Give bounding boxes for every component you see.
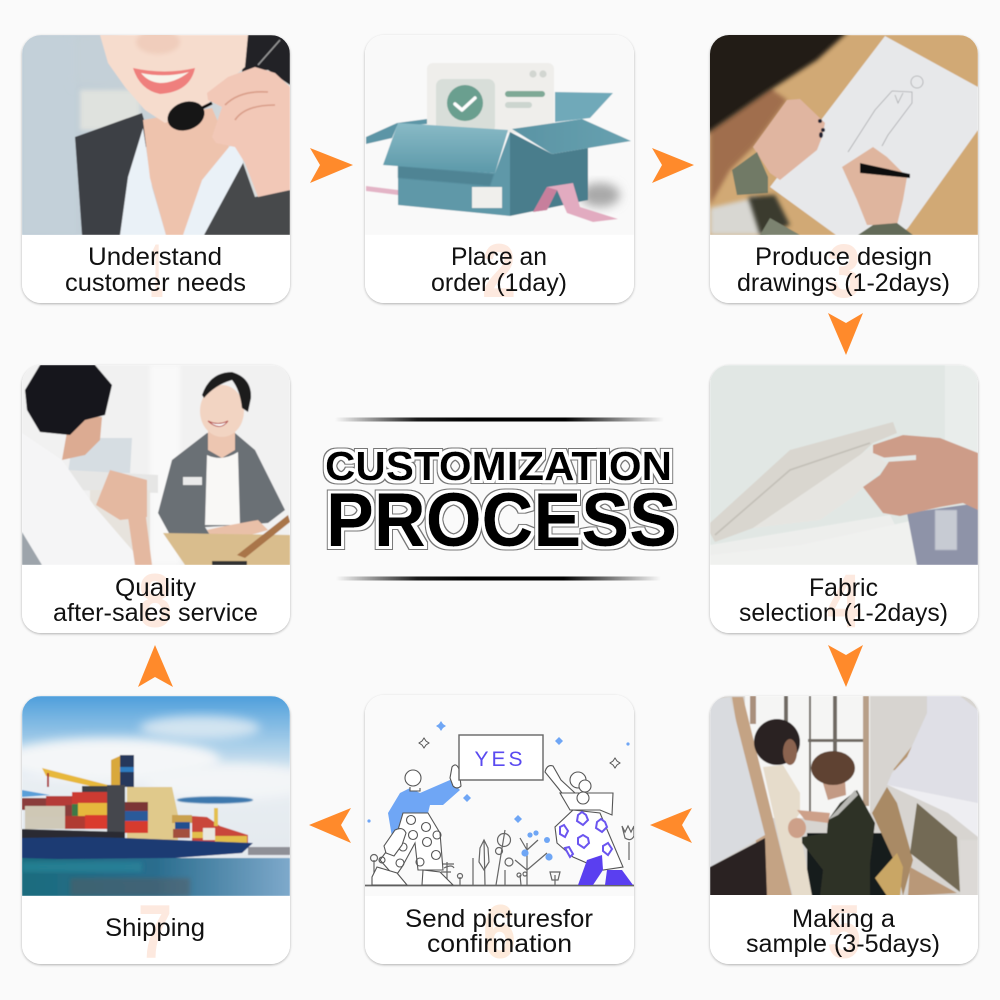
- caption: Shipping: [105, 914, 205, 942]
- panel: step 3 produce design drawings: [705, 30, 978, 314]
- arrow: step 6 to 7: [309, 808, 351, 843]
- title block: [325, 418, 677, 580]
- sign: [459, 735, 543, 780]
- step number 8: 8: [138, 559, 172, 644]
- right figure: [545, 766, 633, 885]
- panel: step 3 produce design drawings: drawings (1-2days): [737, 269, 950, 297]
- caption: Understand: [88, 243, 222, 271]
- photo: tailors fitting a garment: [710, 696, 978, 896]
- step number 3: 3: [827, 229, 861, 314]
- title line 2: PROCESS: [326, 478, 677, 563]
- panel: step 2 place an order: [365, 35, 634, 314]
- photo: hands sketching a design: [705, 30, 978, 235]
- illustration: open box with order document: [365, 62, 632, 223]
- arrow: step 1 to 2: [310, 148, 353, 183]
- caption: Fabric: [809, 574, 878, 602]
- title line 1: CUSTOMIZATION: [325, 443, 672, 489]
- step number 7: 7: [138, 890, 172, 975]
- panel: step 1 understand customer needs: [22, 30, 290, 314]
- panel: step 2 place an order: order (1day): [431, 269, 567, 297]
- plants: [365, 826, 634, 886]
- panel: step 7 shipping: [20, 696, 292, 966]
- sign text: YES: [474, 748, 526, 771]
- photo: hand feeling white fabric: [710, 365, 978, 565]
- step number 4: 4: [827, 559, 861, 644]
- arrow: step 4 to 5: [828, 645, 863, 687]
- panel: step 6 send pictures for confirmation: confirmation: [427, 930, 572, 958]
- caption: Place an: [451, 243, 547, 271]
- step number 2: 2: [482, 229, 516, 314]
- panel: step 8 quality after-sales service: [22, 365, 290, 644]
- arrow: step 7 to 8: [138, 645, 173, 687]
- left figure: [372, 765, 461, 885]
- panel: step 1 understand customer needs: customer needs: [65, 269, 246, 297]
- caption: Produce design: [755, 243, 932, 271]
- photo: customer service agent with headset: [22, 30, 290, 235]
- caption: Quality: [115, 574, 197, 602]
- panel: step 5 making a sample: [710, 696, 978, 975]
- arrow: step 3 to 4: [828, 313, 863, 355]
- arrow: step 5 to 6: [650, 808, 692, 843]
- step number 5: 5: [827, 890, 861, 975]
- photo: container ship at sea: [22, 696, 290, 896]
- arrow: step 2 to 3: [652, 148, 694, 183]
- illustration: two people holding YES sign: [365, 721, 634, 886]
- photo: consultant meeting a customer: [22, 365, 290, 565]
- panel: step 5 making a sample: sample (3-5days): [746, 930, 940, 958]
- caption: Send picturesfor: [405, 905, 593, 933]
- panel: step 4 fabric selection: selection (1-2days): [739, 599, 948, 627]
- panel: step 1 understand customer needs: 1: [150, 229, 163, 314]
- caption: Making a: [792, 905, 895, 933]
- panel: step 8 quality after-sales service: after-sales service: [53, 599, 258, 627]
- panel: step 6 send pictures for confirmation: [365, 695, 634, 975]
- panel: step 4 fabric selection: [710, 365, 978, 644]
- step number 6: 6: [483, 890, 516, 975]
